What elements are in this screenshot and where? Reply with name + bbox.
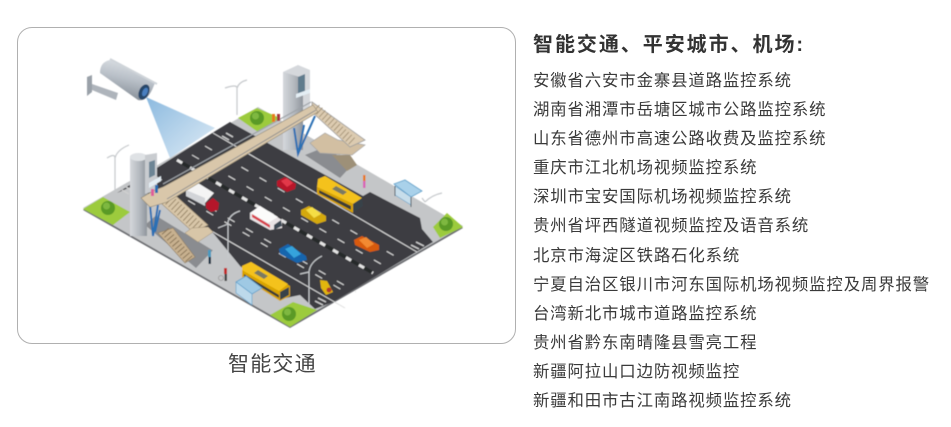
project list: 山东省德州市高速公路收费及监控系统 <box>533 130 826 148</box>
project list: 贵州省黔东南晴隆县雪亮工程 <box>533 334 757 352</box>
project list: 重庆市江北机场视频监控系统 <box>533 159 757 177</box>
main deck <box>141 105 318 207</box>
yellow bus, top <box>317 176 363 213</box>
street lamps <box>107 80 442 304</box>
sidewalk left of bus bay <box>122 186 240 266</box>
bridge pedestrians <box>151 114 280 196</box>
project list: 宁夏自治区银川市河东国际机场视频监控及周界报警 <box>533 276 930 294</box>
caption: 智能交通 <box>228 353 317 376</box>
project list: 北京市海淀区铁路石化系统 <box>533 247 740 265</box>
surveillance camera <box>87 59 157 101</box>
right stairs lower flight <box>332 155 357 171</box>
right tower <box>283 65 315 154</box>
left tower <box>130 153 161 236</box>
pedestrians <box>208 175 366 281</box>
green corner patches with trees <box>83 108 463 327</box>
lane markings <box>135 133 417 308</box>
project list: 安徽省六安市金寨县道路监控系统 <box>533 72 792 90</box>
project list: 湖南省湘潭市岳塘区城市公路监控系统 <box>533 101 826 119</box>
right stair landing <box>310 133 365 155</box>
left stairs upper flight <box>162 196 208 232</box>
camera view cone <box>146 97 215 158</box>
red car <box>277 177 296 192</box>
heading: 智能交通、平安城市、机场: <box>533 34 805 56</box>
parking marks <box>122 133 424 305</box>
right stairs upper flight <box>312 102 365 147</box>
project list: 台湾新北市城市道路监控系统 <box>533 305 757 323</box>
ambulance <box>250 206 282 230</box>
project list <box>533 72 930 410</box>
median barrier <box>177 160 373 273</box>
white truck with red cab <box>186 183 219 212</box>
left stair landing <box>185 227 213 242</box>
orange car <box>354 236 379 252</box>
yellow taxi <box>301 206 326 224</box>
blue car <box>279 244 307 263</box>
road surface <box>117 122 433 309</box>
motorbike rider <box>320 280 333 295</box>
lower yellow bus <box>242 262 290 301</box>
project list: 新疆阿拉山口边防视频监控 <box>533 363 740 381</box>
gray plaza under right stairs <box>305 147 352 178</box>
project list: 深圳市宝安国际机场视频监控系统 <box>533 188 792 206</box>
lower bus stop <box>236 276 262 305</box>
gray plaza under left stairs <box>145 212 215 268</box>
project list: 贵州省坪西隧道视频监控及语音系统 <box>533 217 809 235</box>
left stairs lower flight <box>158 228 195 263</box>
upper-right bus stop <box>394 180 422 207</box>
project list: 新疆和田市古江南路视频监控系统 <box>533 392 792 410</box>
street base <box>83 107 463 328</box>
pedestrian bridge deck and stairs <box>141 102 365 263</box>
panel: rounded image frame <box>17 27 516 344</box>
